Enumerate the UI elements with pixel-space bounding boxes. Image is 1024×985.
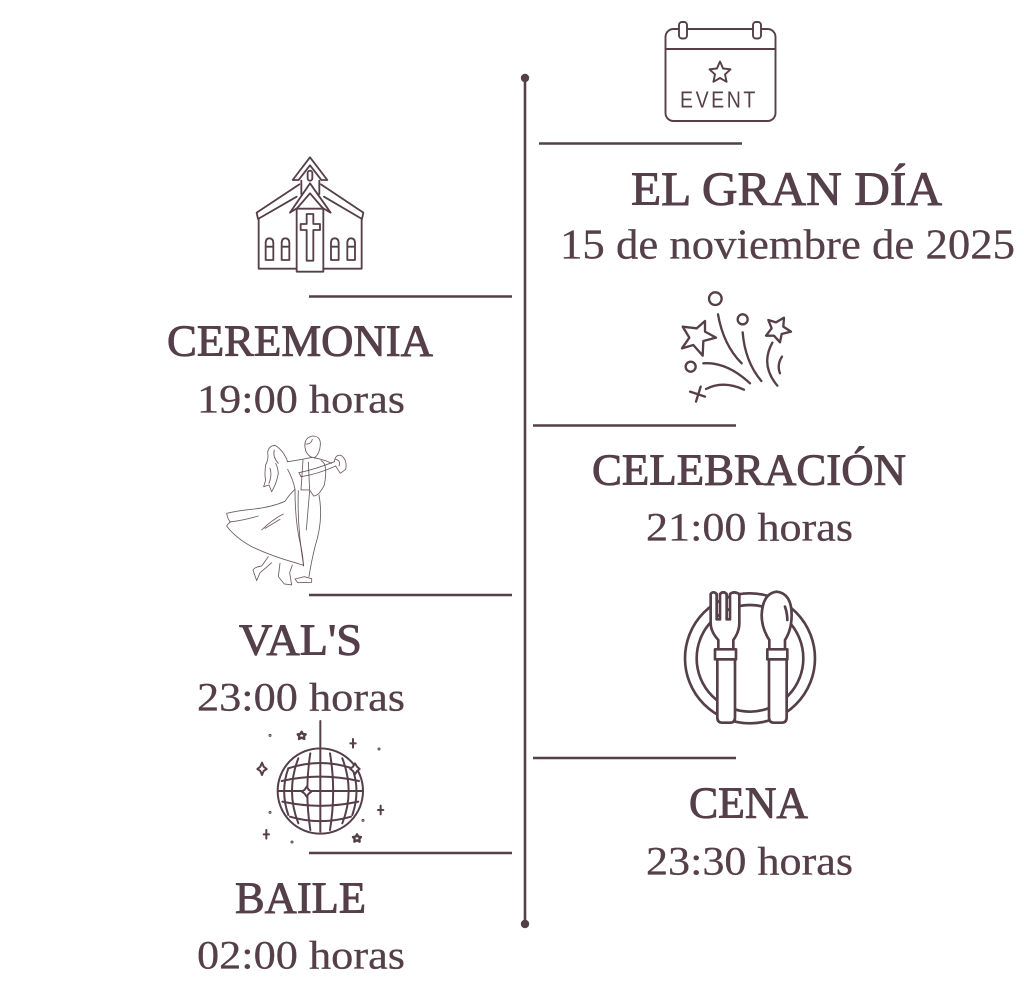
section: baile (197, 874, 405, 978)
section: celebración (592, 446, 906, 550)
icon: plate with fork and spoon (685, 592, 815, 723)
section: ceremonia: 19:00 horas (197, 376, 405, 422)
section: baile: BAILE (235, 874, 366, 922)
section: ceremonia (167, 316, 433, 422)
date: 15 de noviembre de 2025 (560, 222, 1015, 268)
section: val's: 23:00 horas (197, 674, 405, 720)
icon label: EVENT: EVENT (680, 87, 758, 113)
section: ceremonia: CEREMONIA (167, 316, 433, 366)
icon: fireworks (682, 292, 791, 402)
title: El Gran Día: EL GRAN DÍA (631, 163, 942, 216)
section: val's (197, 616, 405, 720)
title: El Gran Día (560, 163, 1015, 268)
section: cena: 23:30 horas (646, 838, 853, 884)
section: celebración: CELEBRACIÓN (592, 446, 906, 494)
icon: disco ball (257, 721, 383, 842)
section: baile: 02:00 horas (197, 932, 405, 978)
icon: waltz dancers (227, 436, 346, 585)
section: cena: CENA (689, 778, 808, 828)
central timeline axis (521, 74, 529, 928)
icon: event calendar (666, 22, 776, 121)
icon: church (257, 157, 363, 272)
section: cena (646, 778, 853, 884)
section: val's: VAL'S (239, 616, 362, 664)
section: celebración: 21:00 horas (646, 504, 853, 550)
